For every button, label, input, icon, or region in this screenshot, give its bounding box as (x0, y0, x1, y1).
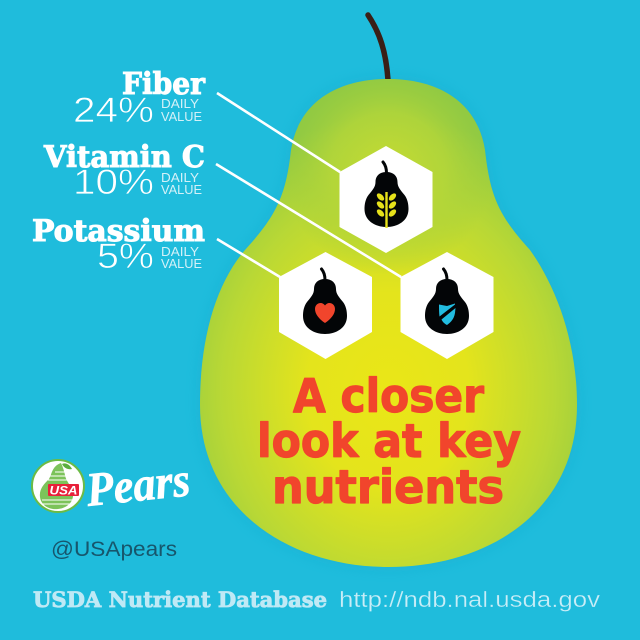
label: potassium: Potassium (32, 214, 205, 249)
icon: vitamin C hexagon with shield pear (400, 252, 494, 359)
title: nutrients (272, 460, 504, 514)
icon: fiber hexagon with wheat pear (340, 146, 432, 253)
title: A closer (293, 369, 484, 423)
title (257, 369, 521, 514)
USA Pears logo (32, 453, 193, 517)
title: look at key (257, 414, 521, 468)
connector lines (216, 93, 401, 277)
label: potassium (32, 214, 205, 276)
source footer: http://ndb.nal.usda.gov (339, 587, 600, 612)
icon: potassium hexagon with heart pear (279, 252, 372, 359)
label: fiber: DAILY (161, 97, 200, 111)
label: vitamin C: Vitamin C (43, 140, 205, 175)
label: vitamin C: VALUE (161, 183, 202, 197)
social handle: @USApears (51, 538, 177, 561)
label: fiber: VALUE (161, 110, 202, 124)
label: vitamin C: DAILY (161, 171, 200, 185)
USA Pears logo: USA (50, 486, 78, 498)
label: vitamin C (43, 140, 205, 202)
USA Pears logo: Pears (83, 453, 193, 517)
label: potassium: 5% (97, 237, 154, 276)
label: vitamin C: 10% (73, 163, 154, 202)
label: fiber: Fiber (122, 67, 206, 102)
label: potassium: VALUE (161, 257, 202, 271)
label: fiber: 24% (73, 91, 154, 130)
label: potassium: DAILY (161, 245, 200, 259)
label: fiber (73, 67, 206, 130)
source footer (33, 587, 600, 612)
source footer: USDA Nutrient Database (33, 587, 327, 612)
pear illustration (200, 15, 577, 567)
